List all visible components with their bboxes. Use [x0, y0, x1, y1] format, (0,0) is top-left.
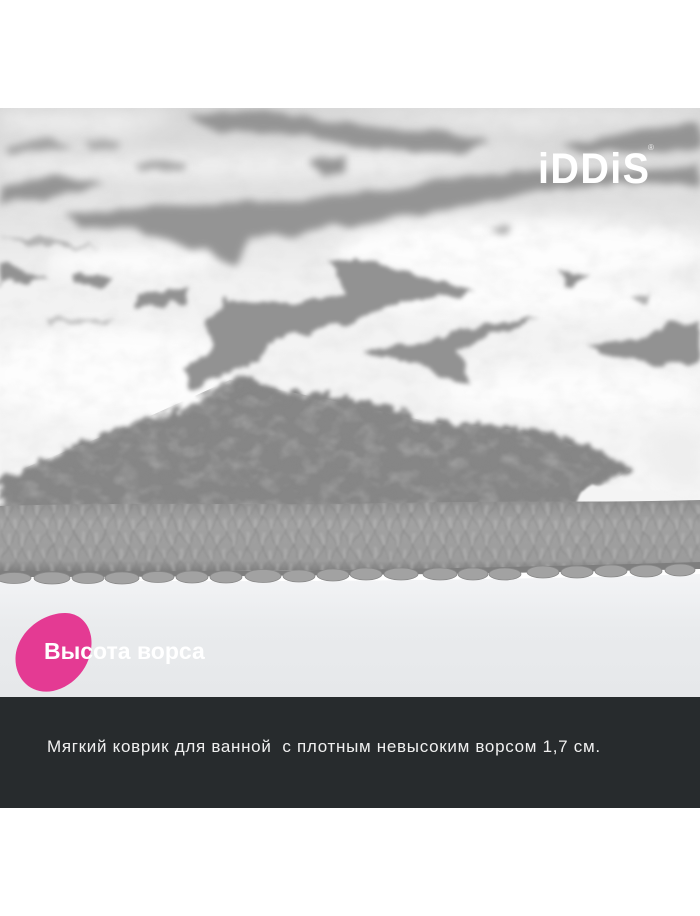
- logo: IDDIS: iDDiS: [538, 145, 650, 193]
- icon: pink blob: [16, 613, 92, 692]
- rug woven border: [0, 498, 700, 574]
- rug stitched edge: [0, 562, 700, 584]
- rug pattern: near grey shapes: [0, 235, 700, 390]
- logo: IDDIS: ®: [648, 143, 654, 152]
- white pile tuft: [576, 484, 603, 502]
- caption text: Мягкий коврик для ванной с плотным невысоким ворсом 1,7 см.: [47, 737, 601, 756]
- rug pattern: blurred far grey bands: [0, 110, 700, 268]
- heading badge: [16, 613, 205, 692]
- thick grey pile: [0, 373, 636, 506]
- background surface: [0, 574, 700, 697]
- caption band: [0, 697, 700, 808]
- heading: Высота ворса: [44, 638, 205, 664]
- rug surface: [0, 108, 700, 528]
- photo: bath rug close-up: [0, 108, 700, 697]
- right white rug edge: [650, 430, 700, 490]
